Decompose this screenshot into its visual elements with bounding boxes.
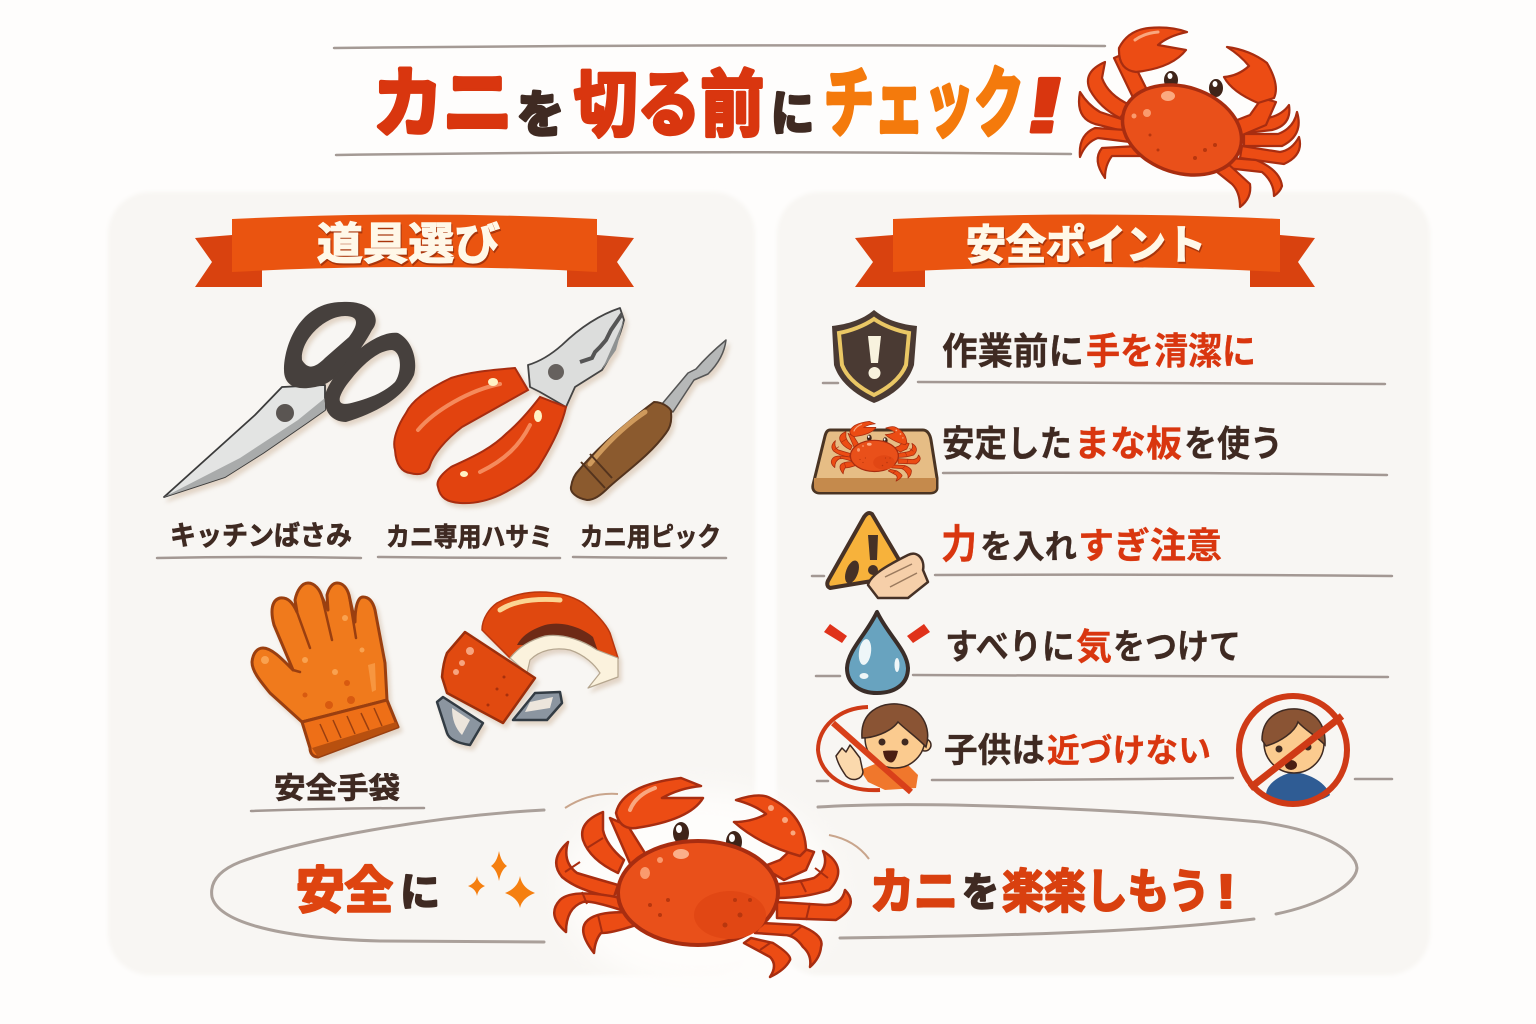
icon: crab claw tool [437, 592, 618, 745]
title: に [771, 88, 814, 141]
row: not too much force: を入れ [980, 528, 1077, 565]
icon: kitchen scissors [164, 302, 415, 497]
closing banner: 楽楽しもう [1002, 865, 1210, 918]
panel: tool selection [108, 192, 755, 975]
icon: warning shield [832, 310, 917, 403]
icon: crab pick [571, 340, 726, 500]
icon: safety glove [252, 583, 398, 757]
closing banner: 安全 [296, 863, 393, 919]
closing banner: カニ [870, 866, 958, 919]
label: crab shears: カニ専用ハサミ [386, 522, 553, 552]
title: 切る前 [574, 66, 764, 146]
row: watch for slipping: すべりに [945, 628, 1075, 667]
row: keep children away: 子供は [944, 732, 1045, 770]
row: not too much force [812, 513, 1392, 598]
icon: child with prohibition sign [1237, 694, 1349, 806]
row: clean hands [823, 310, 1385, 403]
ribbon: safety points: 安全ポイント [966, 222, 1206, 268]
closing banner: ! [1216, 866, 1236, 919]
icon: crab shears [394, 308, 624, 503]
row: keep children away: 近づけない [1047, 732, 1211, 769]
title: ! [1017, 61, 1073, 149]
panel: safety points [777, 192, 1430, 975]
icon: water drop with alert marks [824, 612, 930, 693]
row: watch for slipping: をつけて [1113, 628, 1241, 667]
ribbon: tool selection [195, 214, 634, 287]
icon: title crab [1079, 28, 1300, 207]
row: not too much force: 力 [941, 523, 977, 567]
ribbon: safety points [855, 214, 1315, 287]
row: clean hands: 作業前に [942, 331, 1084, 372]
row: stable cutting board [813, 421, 1387, 493]
icon: cutting board with crab [813, 421, 937, 493]
icon: waving child with prohibition sign [818, 704, 931, 792]
title: カニ [373, 62, 513, 147]
label: crab pick: カニ用ピック [580, 522, 721, 552]
label: safety glove: 安全手袋 [274, 772, 400, 805]
label: kitchen scissors: キッチンばさみ [170, 521, 352, 551]
icon: warning triangle with hand [827, 513, 928, 598]
ribbon: tool selection: 道具選び [317, 220, 500, 269]
row: watch for slipping [816, 612, 1388, 693]
row: stable cutting board: を使う [1184, 423, 1283, 464]
title: チェック [824, 62, 1024, 147]
title [334, 45, 1105, 155]
closing banner: に [400, 871, 440, 915]
title: を [517, 87, 564, 143]
icon: sparkles [468, 851, 535, 908]
label: safety glove [251, 772, 424, 811]
row: keep children away [817, 694, 1392, 806]
row: stable cutting board: まな板 [1074, 423, 1182, 464]
closing banner [212, 790, 1357, 990]
row: watch for slipping: 気 [1076, 626, 1112, 667]
icon: large bottom crab [554, 778, 851, 977]
row: stable cutting board: 安定した [942, 423, 1072, 464]
row: not too much force: すぎ注意 [1078, 525, 1222, 566]
closing banner: を [962, 871, 999, 915]
row: clean hands: 手を清潔に [1086, 331, 1256, 372]
